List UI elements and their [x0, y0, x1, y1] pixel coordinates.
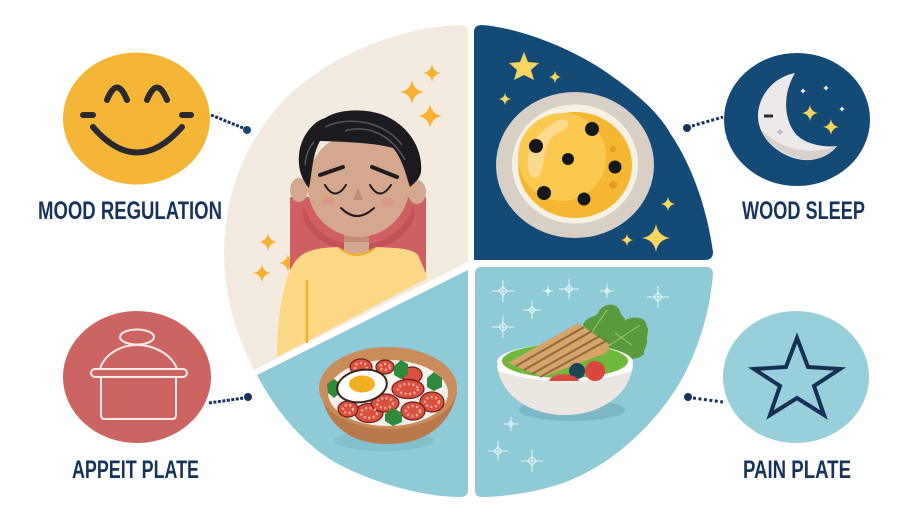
label: APPEIT PLATE	[72, 456, 199, 484]
icon: moon and stars	[724, 53, 870, 186]
panel: night bowl	[474, 25, 713, 260]
label: MOOD REGULATION	[38, 197, 222, 225]
connector	[209, 393, 252, 403]
icon: orange sparkles	[253, 64, 442, 282]
cream quadrant	[224, 25, 468, 370]
salad and sandwich bowl	[497, 305, 648, 421]
panel: person relaxing	[224, 25, 468, 370]
icon: yellow stars	[499, 52, 675, 252]
panel: tomato plate	[257, 270, 468, 497]
bowl of soup with olives	[496, 92, 654, 238]
pain plate callout	[684, 311, 869, 484]
icon: smiling face	[63, 52, 210, 184]
connector	[684, 393, 723, 402]
connector	[683, 117, 723, 132]
navy quadrant	[474, 25, 713, 260]
icon: white sparkles	[488, 279, 669, 472]
appeit plate callout	[63, 311, 252, 484]
label: WOOD SLEEP	[742, 197, 865, 225]
teal quadrant	[475, 267, 713, 497]
wood sleep callout	[683, 53, 870, 225]
icon: star outline	[723, 311, 869, 443]
label: PAIN PLATE	[743, 456, 851, 484]
tomato speckles	[343, 363, 439, 418]
mood regulation callout	[38, 52, 251, 225]
connector	[211, 115, 251, 134]
person illustration	[277, 110, 428, 357]
teal quadrant	[257, 270, 468, 497]
tomato and egg bowl	[319, 347, 457, 451]
icon: cooking pot	[63, 311, 211, 443]
panel: salad bowl	[475, 267, 713, 497]
